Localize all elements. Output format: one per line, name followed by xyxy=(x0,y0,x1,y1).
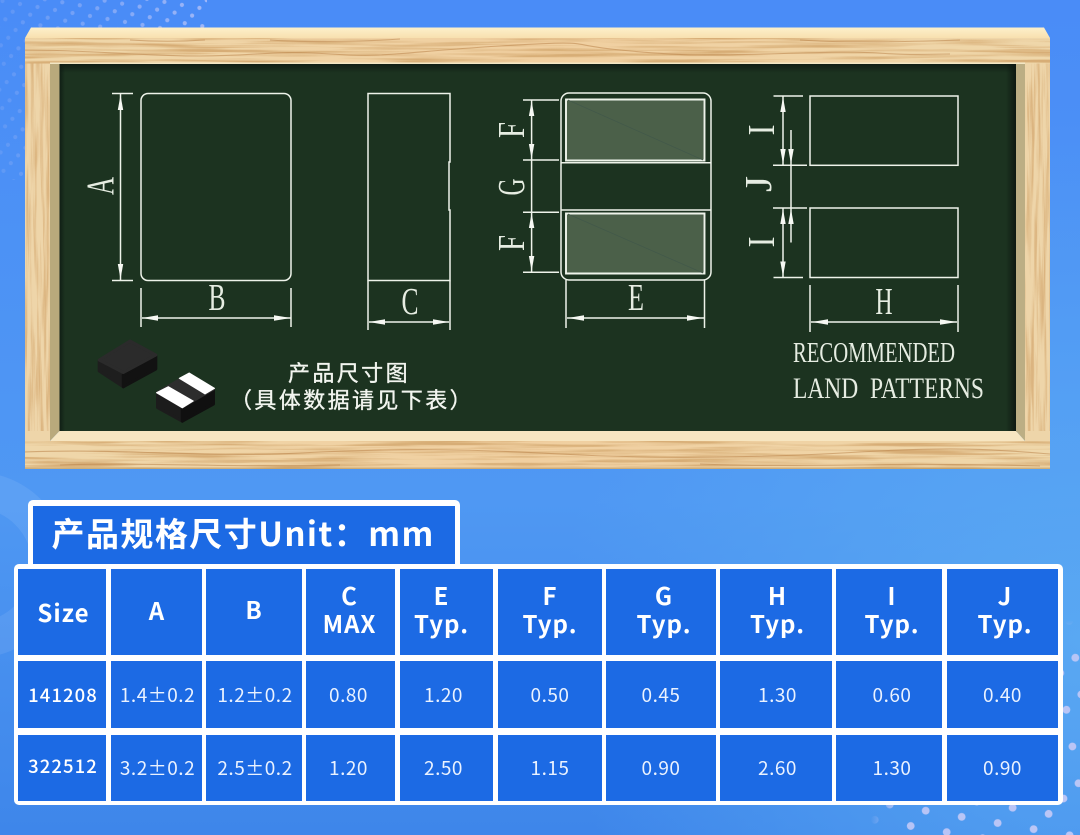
drawing: bottom view E F G: G xyxy=(491,178,533,196)
table row 322512: 1.20 xyxy=(329,754,368,781)
table row 141208: 1.20 xyxy=(424,680,463,708)
text: recommended land patterns: LAND PATTERNS xyxy=(793,372,984,405)
inner side shadows xyxy=(50,63,1025,441)
table header row: B xyxy=(245,591,263,626)
table xyxy=(14,564,1063,805)
table header row: F xyxy=(542,576,558,612)
table row 322512: 1.30 xyxy=(873,754,911,781)
table row 322512: 2.5±0.2 xyxy=(217,754,293,781)
table header row: Typ. xyxy=(750,605,805,640)
table row 141208: 0.60 xyxy=(873,680,911,708)
table row 322512: 0.90 xyxy=(642,754,680,781)
table row 141208: 141208 xyxy=(28,682,98,708)
drawing: top view A B xyxy=(79,94,291,327)
table header row: MAX xyxy=(323,605,376,640)
table header row: H xyxy=(768,576,787,612)
drawing: top view A B: B xyxy=(208,277,226,319)
drawing: land patterns H I J xyxy=(738,96,958,332)
drawing: bottom view E F G: F xyxy=(491,122,533,138)
icon: chip with white terminals xyxy=(156,373,214,421)
table header row: A xyxy=(149,592,165,627)
table row 141208: 0.45 xyxy=(642,680,680,708)
bottom ledge xyxy=(25,431,1050,469)
table row 322512: 3.2±0.2 xyxy=(120,754,195,781)
table header row: Typ. xyxy=(977,605,1033,640)
table header row: Size xyxy=(37,594,90,629)
table row 322512: 322512 xyxy=(28,753,98,779)
drawing: land patterns H I J: H xyxy=(876,281,892,323)
drawing: land patterns H I J: I xyxy=(741,124,783,136)
heading tab: product spec unit: 产品规格尺寸Unit：mm xyxy=(52,508,435,556)
text: recommended land patterns xyxy=(793,337,984,405)
drawing: land patterns H I J: I xyxy=(741,236,783,248)
drawing: bottom view E F G: E xyxy=(628,277,644,319)
table row 141208: 1.30 xyxy=(758,680,797,708)
drawing: bottom view E F G xyxy=(491,93,711,328)
left post xyxy=(25,60,50,435)
table header row: Typ. xyxy=(864,605,920,640)
table header row: J xyxy=(998,576,1012,612)
caption: product dimension drawing note xyxy=(230,356,474,415)
drawing: side view C: C xyxy=(402,281,418,323)
drawing: top view A B: A xyxy=(79,177,122,195)
top bar xyxy=(25,28,1050,64)
drawing: land patterns H I J: J xyxy=(738,176,780,192)
table row 141208: 0.40 xyxy=(983,680,1022,708)
table row 141208: 1.2±0.2 xyxy=(217,680,293,708)
table row 322512 xyxy=(18,735,1058,801)
table header row xyxy=(18,569,1058,655)
table header row: Typ. xyxy=(522,605,578,640)
icon: chip plain xyxy=(99,341,156,387)
drawing: side view C xyxy=(368,94,450,330)
chalkboard xyxy=(59,63,1017,432)
table row 322512: 0.90 xyxy=(983,754,1022,781)
caption: product dimension drawing note: 产品尺寸图 xyxy=(288,356,410,388)
table header row: G xyxy=(655,576,673,612)
table row 141208 xyxy=(18,661,1058,728)
table header row: I xyxy=(888,576,896,612)
table row 322512: 2.50 xyxy=(424,754,463,781)
table row 322512: 2.60 xyxy=(758,754,797,781)
table row 141208: 0.50 xyxy=(531,680,569,708)
text: recommended land patterns: RECOMMENDED xyxy=(793,337,955,369)
table row 141208: 0.80 xyxy=(329,680,368,708)
table row 322512: 1.15 xyxy=(531,754,569,781)
right post xyxy=(1025,60,1050,435)
table header row: Typ. xyxy=(414,605,469,640)
caption: product dimension drawing note: （具体数据请见下表） xyxy=(230,383,474,415)
drawing: bottom view E F G: F xyxy=(491,235,533,251)
table header row: E xyxy=(434,576,449,612)
heading tab: product spec unit xyxy=(28,500,460,570)
table header row: Typ. xyxy=(636,605,692,640)
table row 141208: 1.4±0.2 xyxy=(120,680,195,708)
table header row: C xyxy=(341,576,358,612)
